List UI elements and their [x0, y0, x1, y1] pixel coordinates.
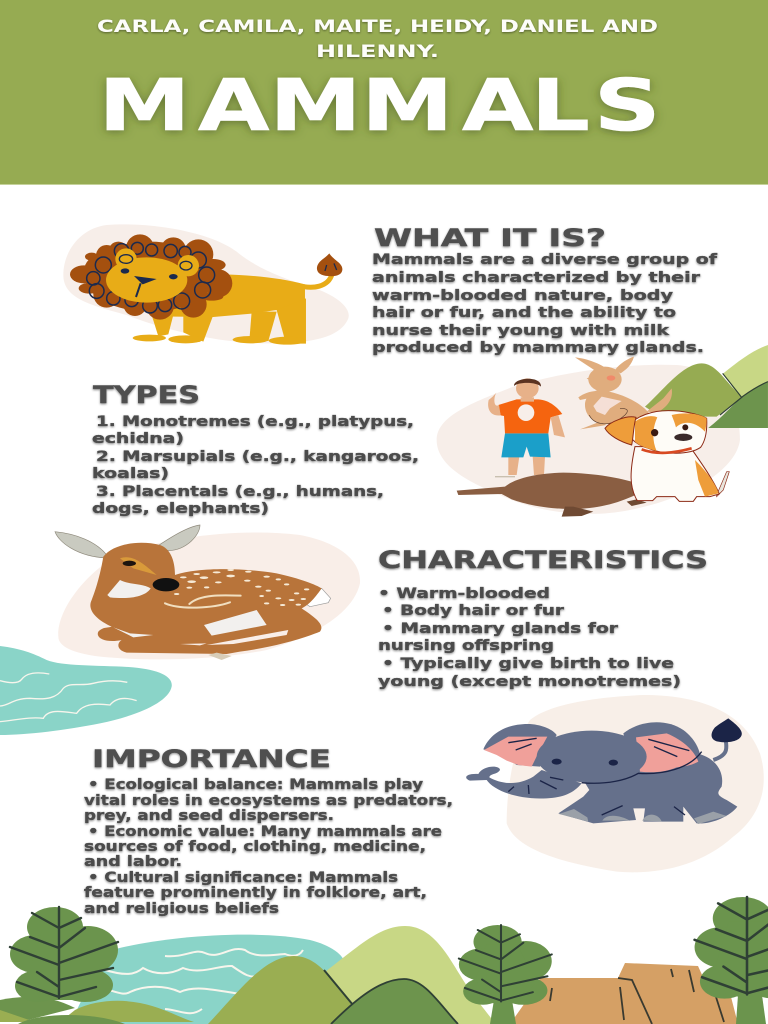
list: • Typically give birth to live [382, 656, 674, 672]
panel: types [92, 381, 419, 517]
lion body [133, 274, 306, 345]
mid green hill [208, 956, 360, 1024]
list [84, 777, 453, 917]
authors line: CARLA, CAMILA, MAITE, HEIDY, DANIEL AND [97, 17, 658, 36]
trunk and head [466, 767, 582, 799]
list [92, 414, 419, 517]
tree centre [459, 925, 552, 1024]
illustration: elephant [466, 695, 764, 872]
list [378, 586, 681, 690]
list: koalas) [92, 466, 169, 482]
illustration: bottom landscape [0, 897, 768, 1024]
list: 2. Marsupials (e.g., kangaroos, [96, 449, 419, 465]
header banner [0, 0, 768, 185]
list: • Economic value: Many mammals are [88, 824, 442, 840]
list: • Warm-blooded [378, 586, 550, 602]
list: 3. Placentals (e.g., humans, [96, 484, 384, 500]
dark green hill [331, 979, 458, 1024]
list: dogs, elephants) [92, 501, 269, 517]
list: feature prominently in folklore, art, [84, 885, 427, 901]
elephant body [558, 753, 737, 824]
right ear [623, 722, 700, 773]
text block: produced by mammary glands. [372, 340, 704, 356]
text block: warm-blooded nature, body [372, 288, 674, 304]
panel: what it is [372, 224, 718, 356]
illustration: deer [55, 525, 360, 660]
list: nursing offspring [378, 638, 554, 654]
list: vital roles in ecosystems as predators, [84, 793, 453, 809]
lion mane [70, 234, 232, 320]
light green hill [325, 926, 495, 1024]
heading: WHAT IT IS? [374, 224, 606, 252]
list: young (except monotremes) [378, 674, 681, 690]
illustration: animal group [437, 345, 768, 517]
hills [645, 345, 768, 428]
text block: animals characterized by their [372, 270, 701, 286]
list: and labor. [84, 854, 182, 870]
text block: hair or fur, and the ability to [372, 305, 676, 321]
list: prey, and seed dispersers. [84, 808, 334, 824]
list: 1. Monotremes (e.g., platypus, [96, 414, 414, 430]
platypus [457, 473, 670, 517]
puppy [605, 411, 729, 501]
illustration: lake left [0, 646, 172, 735]
list: • Mammary glands for [382, 621, 619, 637]
lake [70, 935, 345, 1024]
tan rock [510, 963, 738, 1024]
small hills [0, 997, 194, 1024]
tree right [695, 897, 768, 1024]
tree left [10, 907, 118, 1002]
list: • Body hair or fur [382, 603, 565, 619]
list: echidna) [92, 431, 184, 447]
authors line [97, 17, 658, 61]
heading: CHARACTERISTICS [378, 546, 708, 574]
kangaroo [575, 357, 672, 429]
text block: Mammals are a diverse group of [372, 252, 718, 268]
heading: IMPORTANCE [92, 745, 331, 773]
text block [372, 252, 718, 356]
text block: nurse their young with milk [372, 323, 669, 339]
list: and religious beliefs [84, 901, 279, 917]
list: • Ecological balance: Mammals play [88, 777, 424, 793]
panel: characteristics [378, 546, 708, 690]
title: MAMMALS [99, 65, 660, 147]
list: sources of food, clothing, medicine, [84, 839, 426, 855]
list: • Cultural significance: Mammals [88, 870, 398, 886]
heading: TYPES [93, 381, 200, 409]
person [488, 378, 565, 477]
illustration: lion [63, 224, 349, 345]
panel: importance [84, 745, 453, 917]
authors line: HILENNY. [316, 42, 439, 61]
left ear [483, 724, 557, 767]
